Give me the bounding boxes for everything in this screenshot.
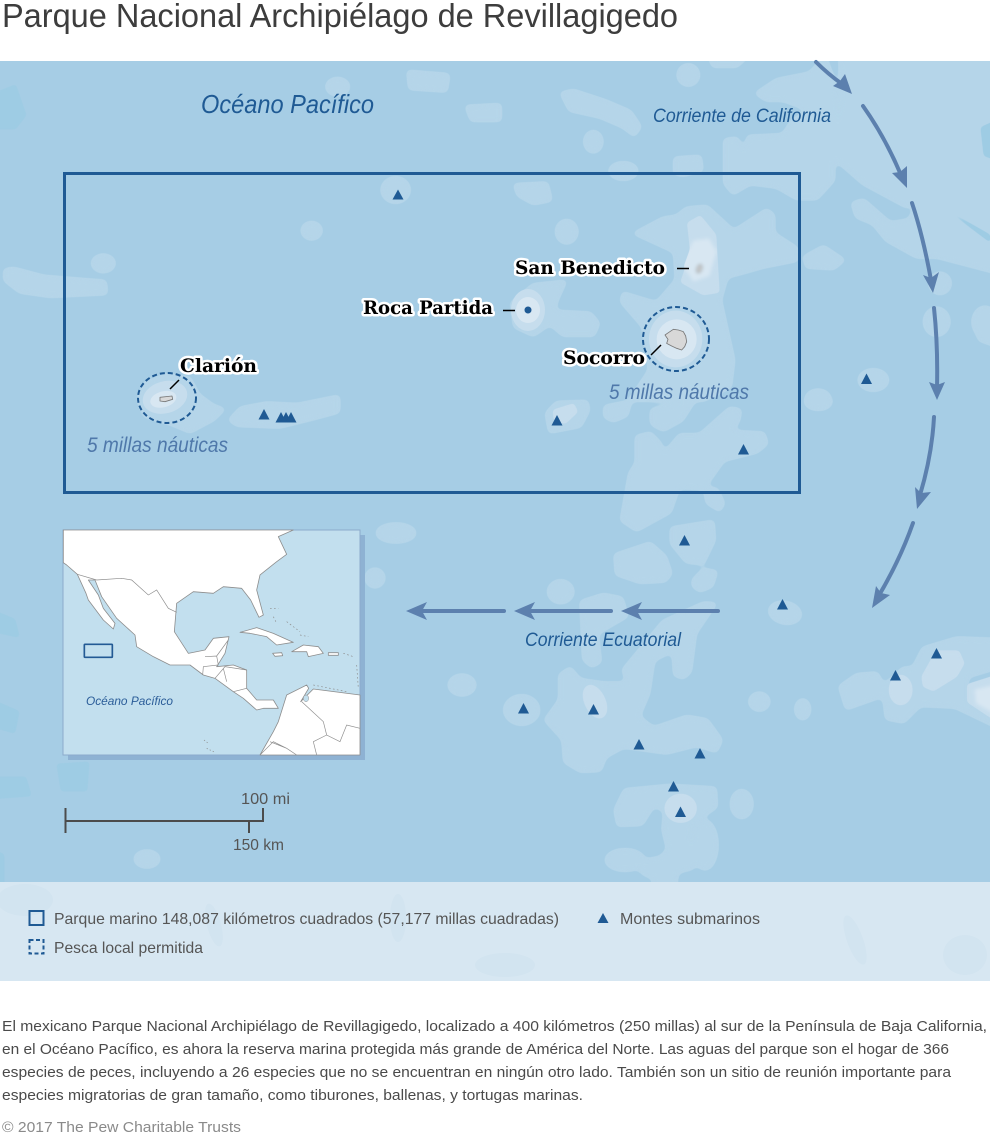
panel: marine park boundary bbox=[64, 174, 800, 492]
description text: especies migratorias de gran tamaño, como tiburones, ballenas, y tortugas marinas. bbox=[2, 1087, 583, 1104]
label: Clarión: Clarión bbox=[180, 356, 258, 377]
arrows: Equatorial Current bbox=[406, 602, 718, 620]
arrows: California Current bbox=[816, 62, 945, 608]
leader lines bbox=[170, 268, 689, 389]
legend item: local fishing: Pesca local permitida bbox=[54, 940, 203, 957]
label: Roca Partida: Roca Partida bbox=[363, 298, 493, 319]
scale bar bbox=[66, 791, 290, 854]
panel: ocean map bbox=[0, 50, 990, 893]
description text: El mexicano Parque Nacional Archipiélago de Revillagigedo, localizado a 400 kilómetros (250 millas) al sur de la Península de Baja California, bbox=[2, 1018, 987, 1035]
description text: especies de peces, incluyendo a 26 especies que no se encuentran en ningún otro lado. También son un sitio de reunión importante para bbox=[2, 1064, 952, 1081]
current label: California: Corriente de California bbox=[653, 106, 831, 127]
inset ocean label: Océano Pacífico bbox=[86, 696, 174, 708]
label: Socorro: Socorro bbox=[563, 348, 645, 369]
legend item: marine park: Parque marino 148,087 kilómetros cuadrados (57,177 millas cuadradas) bbox=[54, 911, 559, 928]
current label: Ecuatorial: Corriente Ecuatorial bbox=[525, 630, 682, 651]
scale bar: 100 mi bbox=[241, 791, 290, 808]
island: Clarión with dashed 5 nm limit bbox=[138, 373, 196, 423]
island: Roca Partida bbox=[511, 289, 545, 331]
panel: legend bbox=[0, 882, 990, 981]
radius label: Clarión: 5 millas náuticas bbox=[87, 434, 228, 457]
label: San Benedicto: San Benedicto bbox=[515, 258, 665, 279]
description text: en el Océano Pacífico, es ahora la reserva marina protegida más grande de América del Norte. Las aguas del parque son el hogar de 366 bbox=[2, 1041, 949, 1058]
legend item: seamounts: Montes submarinos bbox=[620, 911, 760, 928]
ocean label: Océano Pacífico bbox=[201, 89, 374, 119]
inset locator map bbox=[63, 530, 365, 760]
description text bbox=[2, 1018, 987, 1104]
radius label: Socorro: 5 millas náuticas bbox=[609, 381, 749, 404]
island: Socorro with dashed 5 nm limit bbox=[643, 307, 709, 371]
scale bar: 150 km bbox=[233, 837, 284, 854]
island: San Benedicto bbox=[682, 217, 718, 294]
copyright: © 2017 The Pew Charitable Trusts bbox=[2, 1119, 241, 1136]
seamount markers bbox=[258, 190, 942, 817]
